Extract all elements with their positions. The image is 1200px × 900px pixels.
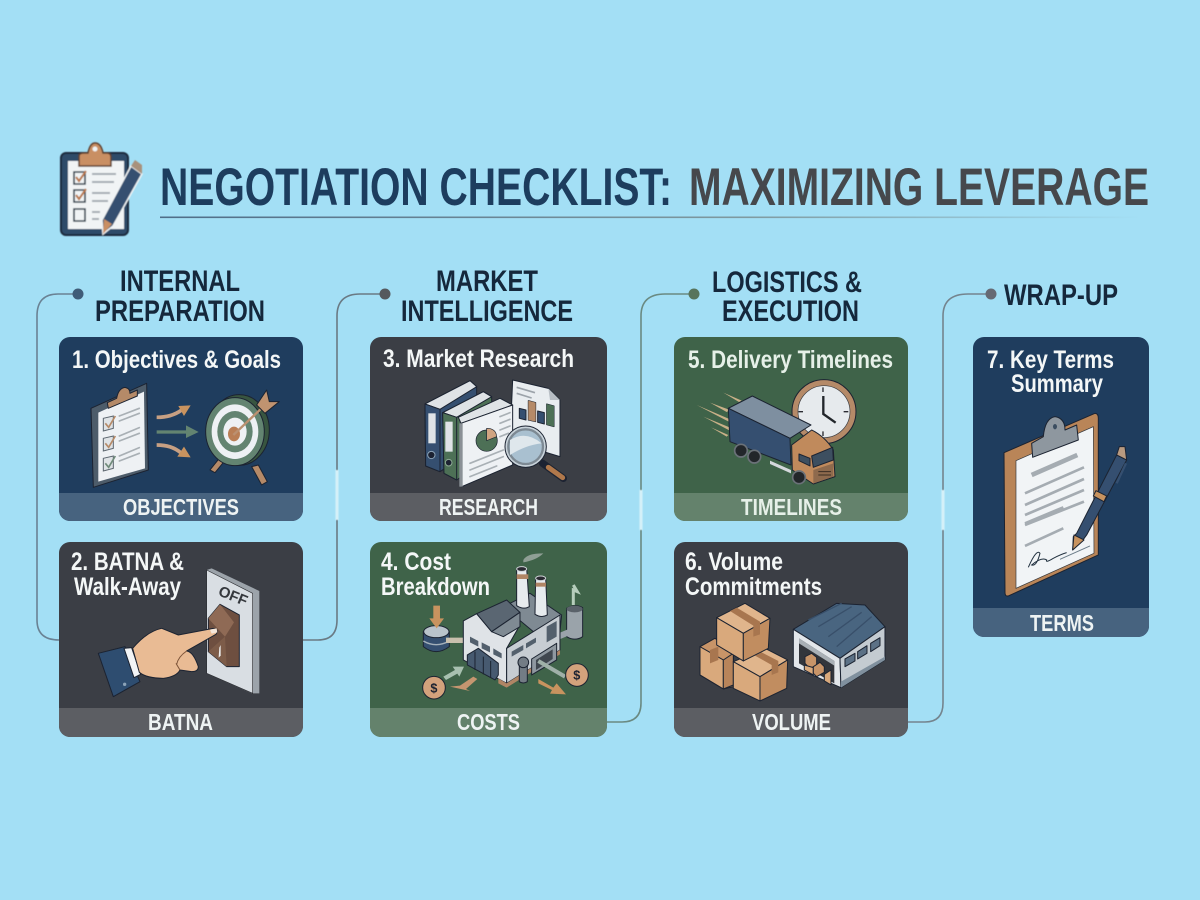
panel: 4 cost breakdown: COSTS: [457, 709, 520, 735]
panel: 4 cost breakdown: [370, 542, 607, 737]
panel: 6 volume commitments: 6. Volume: [685, 548, 783, 576]
panel: 2 BATNA and walk-away: Walk-Away: [74, 573, 181, 601]
icon: factory with cost flows: $: [573, 669, 580, 683]
icon: binders report and magnifier: [425, 380, 563, 487]
heading: logistics and execution: EXECUTION: [722, 295, 859, 328]
heading: market intelligence: [401, 265, 573, 328]
panel: 2 BATNA and walk-away: BATNA: [148, 709, 213, 735]
panel: 1 objectives and goals: 1. Objectives & Goals: [72, 346, 281, 374]
connector: wrap-up: [908, 294, 991, 722]
panel: 4 cost breakdown: Breakdown: [381, 573, 490, 601]
panel: 3 market research: [370, 337, 607, 521]
panel: 6 volume commitments: [674, 542, 908, 737]
panel: 2 BATNA and walk-away: 2. BATNA &: [71, 548, 184, 576]
connector: market intelligence: [303, 294, 385, 640]
panel: 6 volume commitments: VOLUME: [752, 709, 831, 735]
panel: 5 delivery timelines: 5. Delivery Timelines: [688, 346, 893, 374]
icon: signed contract clipboard with pen: [1004, 413, 1127, 596]
icon: hand pressing off switch: OFF: [216, 583, 250, 610]
heading: internal preparation: [95, 265, 265, 328]
panel: 1 objectives and goals: [59, 337, 303, 521]
icon: hand pressing off switch: [98, 568, 259, 697]
connector: logistics and execution: [607, 294, 694, 722]
panel: 1 objectives and goals: OBJECTIVES: [123, 494, 239, 520]
heading: market intelligence: INTELLIGENCE: [401, 295, 573, 328]
panel: 5 delivery timelines: [674, 337, 908, 521]
panel: 7 key terms summary: TERMS: [1030, 610, 1094, 636]
panel: 3 market research: RESEARCH: [439, 494, 538, 520]
infographic canvas: [36, 141, 1149, 737]
heading: internal preparation: PREPARATION: [95, 295, 265, 328]
node dot: internal preparation: [72, 288, 84, 300]
icon: truck and clock: [697, 380, 856, 484]
panel: 2 BATNA and walk-away: [59, 542, 303, 737]
heading: logistics and execution: LOGISTICS &: [712, 266, 862, 299]
icon: stacked boxes and warehouse: [700, 603, 885, 701]
panel: 6 volume commitments: Commitments: [685, 573, 822, 601]
heading: wrap-up: WRAP-UP: [1004, 279, 1118, 312]
connector: internal preparation: [37, 294, 78, 640]
panel: 3 market research: 3. Market Research: [383, 345, 574, 373]
panel: 7 key terms summary: 7. Key Terms: [987, 346, 1114, 374]
panel: 7 key terms summary: [973, 337, 1149, 637]
heading: market intelligence: MARKET: [436, 265, 538, 298]
node dot: logistics and execution: [688, 288, 700, 300]
icon: clipboard arrows and target: [91, 383, 279, 487]
node dot: wrap-up: [986, 288, 996, 300]
icon: factory with cost flows: [423, 553, 588, 699]
node dot: market intelligence: [380, 288, 390, 300]
panel: 4 cost breakdown: 4. Cost: [381, 548, 452, 576]
panel: 7 key terms summary: Summary: [1011, 370, 1103, 398]
icon: checklist clipboard with pen: [61, 143, 142, 235]
panel: 5 delivery timelines: TIMELINES: [741, 494, 842, 520]
icon: factory with cost flows: $: [430, 681, 437, 695]
heading: logistics and execution: [712, 266, 862, 328]
heading: internal preparation: INTERNAL: [120, 265, 240, 298]
title: NEGOTIATION CHECKLIST:: [160, 158, 672, 217]
